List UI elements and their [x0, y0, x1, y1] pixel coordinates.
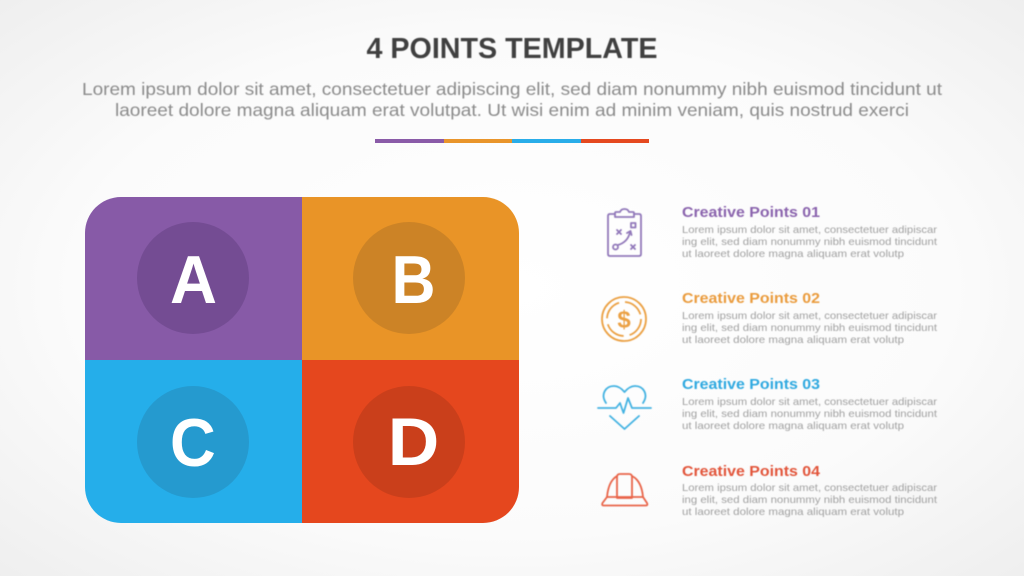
text block: point 02: ut laoreet dolore magna aliquam erat volutp [682, 334, 904, 346]
text block: point 03: ut laoreet dolore magna aliquam erat volutp [682, 420, 904, 432]
text block: point 01: ut laoreet dolore magna aliquam erat volutp [682, 248, 904, 260]
text block: point 02: Creative Points 02 [682, 291, 820, 307]
quadrant D: D [388, 404, 439, 480]
icon: heart with pulse [598, 386, 651, 429]
title: 4 POINTS TEMPLATE [366, 33, 658, 65]
text block: point 04: Lorem ipsum dolor sit amet, consectetuer adipiscar [682, 482, 938, 494]
text block: point 03: Creative Points 03 [682, 377, 820, 393]
text block: point 04 [682, 464, 938, 518]
icon: hard hat [602, 474, 647, 506]
text block: point 04: Creative Points 04 [682, 464, 820, 480]
quadrant D [353, 386, 465, 498]
text block: point 01: Creative Points 01 [682, 205, 820, 221]
subtitle text: Lorem ipsum dolor sit amet, consectetuer adipiscing elit, sed diam nonummy nibh euismod tincidunt ut [82, 79, 942, 99]
subtitle text [82, 79, 942, 120]
quadrant B: B [392, 242, 436, 318]
text block: point 03: Lorem ipsum dolor sit amet, consectetuer adipiscar [682, 396, 938, 408]
panel: 4-quadrant matrix [85, 197, 519, 523]
text block: point 01: ing elit, sed diam nonummy nibh euismod tincidunt [682, 236, 937, 248]
icon: dollar coin [602, 297, 646, 341]
quadrant C [137, 386, 249, 498]
text block: point 04: ing elit, sed diam nonummy nibh euismod tincidunt [682, 494, 937, 506]
text block: point 04: ut laoreet dolore magna aliquam erat volutp [682, 506, 904, 518]
text block: point 02: Lorem ipsum dolor sit amet, consectetuer adipiscar [682, 310, 938, 322]
text block: point 02 [682, 291, 938, 346]
text block: point 03 [682, 377, 938, 432]
quadrant C: C [170, 405, 216, 481]
quadrant B [353, 222, 465, 334]
colour divider [375, 139, 649, 143]
icon: dollar coin: $ [617, 306, 631, 334]
quadrant A [137, 222, 249, 334]
text block: point 01 [682, 205, 938, 260]
quadrant A: A [170, 242, 217, 318]
text block: point 03: ing elit, sed diam nonummy nibh euismod tincidunt [682, 408, 937, 420]
text block: point 01: Lorem ipsum dolor sit amet, consectetuer adipiscar [682, 224, 938, 236]
text block: point 02: ing elit, sed diam nonummy nibh euismod tincidunt [682, 322, 937, 334]
subtitle text: laoreet dolore magna aliquam erat volutpat. Ut wisi enim ad minim veniam, quis nostrud exerci [115, 100, 909, 120]
icon: clipboard strategy [608, 209, 641, 256]
